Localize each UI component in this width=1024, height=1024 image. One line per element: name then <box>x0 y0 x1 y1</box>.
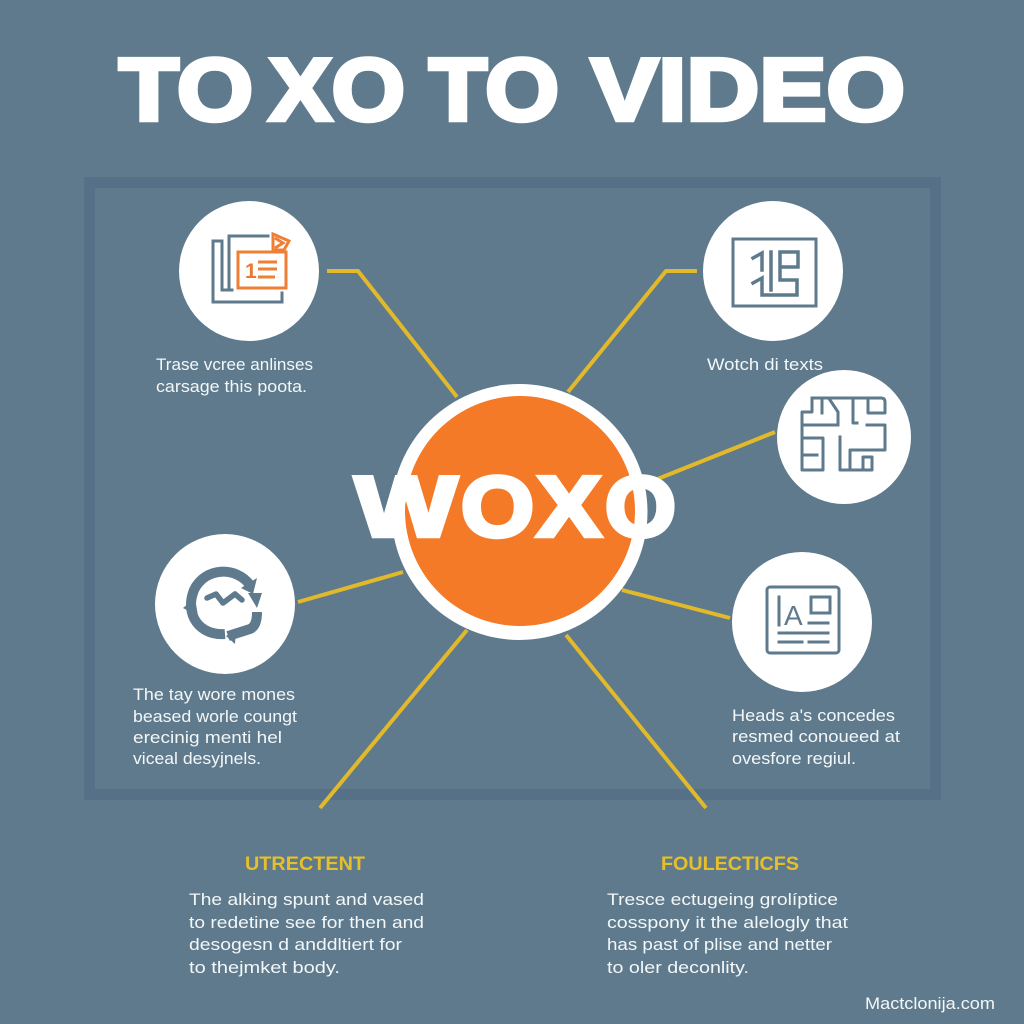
text block: top left caption <box>156 356 313 396</box>
title <box>119 40 905 139</box>
panel: diagram frame <box>90 182 936 794</box>
text block: left caption: The tay wore mones <box>133 686 295 704</box>
icon: document with letter A <box>732 552 872 692</box>
text block: bottom right: Tresce ectugeing grolíptice <box>607 891 838 909</box>
icon: circuit maze <box>777 370 911 504</box>
text block: bottom left <box>189 891 424 977</box>
text block: right caption <box>732 707 900 768</box>
text block: bottom left: desogesn d anddltiert for <box>189 936 403 954</box>
text block: bottom left: The alking spunt and vased <box>189 891 424 909</box>
text block: left caption <box>133 686 297 768</box>
central hub: WOXO: O <box>461 460 534 555</box>
text block: right caption: ovesfore regiul. <box>732 750 856 768</box>
text block: top left caption: Trase vcree anlinses <box>156 356 313 374</box>
text block: top right caption: Wotch di texts <box>707 356 823 374</box>
title: TO <box>119 40 253 139</box>
central hub: WOXO: O <box>605 460 676 555</box>
icon: document with letter A: A <box>784 600 803 631</box>
text block: left caption: beased worle coungt <box>133 708 297 726</box>
heading: UTRECTENT: UTRECTENT <box>245 854 365 875</box>
website credit: Mactclonija.com <box>865 995 995 1013</box>
central hub: WOXO: W <box>355 460 458 555</box>
text block: right caption: Heads a's concedes <box>732 707 895 725</box>
icon: layered documents with play flag: 1 <box>245 260 257 283</box>
icon: circular arrows with face <box>155 534 295 674</box>
text block: bottom right <box>607 891 848 977</box>
title: VIDEO <box>591 40 905 139</box>
text block: bottom right: cosspony it the alelogly that <box>607 914 848 932</box>
heading: FOULECTICFS: FOULECTICFS <box>661 854 799 875</box>
text block: bottom right: to oler deconlity. <box>607 959 749 977</box>
title: TO <box>429 40 559 139</box>
connector lines <box>298 271 775 808</box>
text block: right caption: resmed conoueed at <box>732 728 900 746</box>
icon: framed code glyph <box>703 201 843 341</box>
central hub: WOXO <box>355 384 676 640</box>
central hub: WOXO: X <box>537 460 601 555</box>
text block: left caption: erecinig menti hel <box>133 729 282 747</box>
text block: bottom right: has past of plise and netter <box>607 936 833 954</box>
text block: bottom left: to redetine see for then and <box>189 914 424 932</box>
text block: bottom left: to thejmket body. <box>189 959 340 977</box>
title: XO <box>269 40 405 139</box>
icon: layered documents with play flag <box>179 201 319 341</box>
text block: top left caption: carsage this poota. <box>156 378 307 396</box>
text block: left caption: viceal desyjnels. <box>133 750 261 768</box>
